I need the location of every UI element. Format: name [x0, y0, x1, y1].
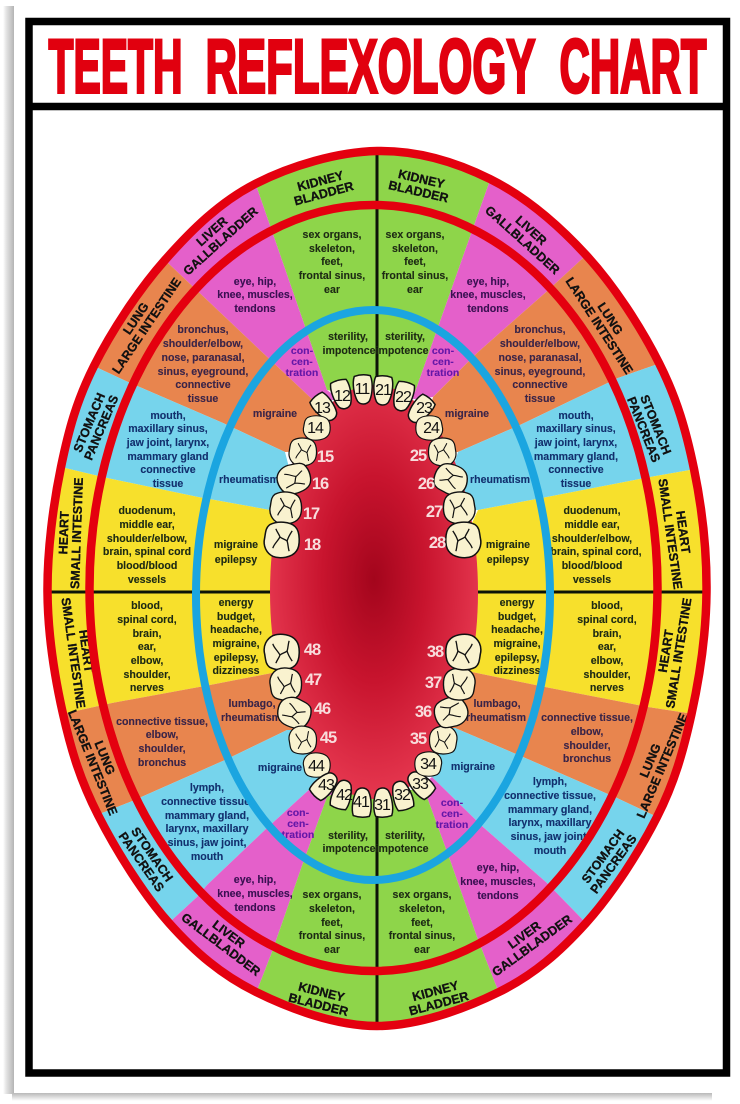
tooth numbers: 41	[353, 794, 370, 811]
tooth 35	[429, 726, 457, 754]
tooth 38	[446, 634, 481, 670]
zone text upper left	[103, 229, 376, 586]
text: blood: blood,	[591, 600, 623, 612]
text: rheumatism: rheumatism	[219, 474, 279, 486]
text: mouth: mammary gland,	[534, 451, 618, 463]
text: sex organs: ear	[414, 944, 430, 956]
label: heart small intestine lower left	[58, 595, 101, 709]
text: bronchus: nose, paranasal,	[161, 352, 245, 364]
text: eye hip: eye, hip,	[234, 276, 276, 288]
label: kidney bladder lower left	[287, 978, 353, 1019]
tooth numbers: 44	[308, 758, 325, 775]
label: kidney bladder upper left: KIDNEY	[296, 168, 346, 194]
text: sex organs: ear	[407, 284, 423, 296]
tooth 46	[274, 693, 315, 732]
text: duodenum: brain, spinal cord,	[550, 546, 642, 558]
tooth numbers: 28	[429, 534, 446, 552]
zone text upper right	[376, 229, 642, 586]
tooth numbers: 47	[305, 671, 322, 689]
text: sex organs: skeleton,	[399, 903, 445, 915]
label: liver gallbladder upper left: LIVER	[194, 214, 230, 249]
tooth numbers: 22	[395, 389, 412, 406]
tooth 37	[443, 668, 475, 700]
text: bronchus: sinus, eyeground,	[495, 366, 585, 378]
tooth 24	[416, 416, 443, 440]
tooth numbers: 15	[317, 448, 334, 466]
label: lung large intestine upper left: LUNG	[120, 300, 152, 337]
text: bronchus: connective	[175, 379, 231, 391]
tooth numbers: 24	[423, 420, 440, 437]
tooth numbers: 43	[318, 777, 335, 794]
label: lung large intestine lower left: LARGE INTESTINE	[65, 708, 120, 817]
text: blood: elbow,	[131, 655, 163, 667]
text: energy budget: epilepsy,	[214, 652, 258, 664]
text: bronchus: bronchus,	[177, 324, 229, 336]
label: stomach pancreas upper right: STOMACH	[637, 393, 674, 457]
text: duodenum: middle ear,	[564, 519, 620, 531]
text: blood: spinal cord,	[117, 614, 177, 626]
zone text lower left	[116, 597, 376, 956]
label: stomach pancreas lower right: PANCREAS	[588, 832, 640, 896]
label: stomach pancreas lower right: STOMACH	[579, 827, 627, 886]
text: duodenum: shoulder/elbow,	[107, 533, 187, 545]
tooth 45	[289, 726, 317, 754]
label: stomach pancreas upper left: STOMACH	[71, 391, 108, 454]
text: lymph: mouth	[534, 845, 566, 857]
tooth numbers: 46	[314, 700, 331, 718]
text: sterility: sterility,	[385, 830, 425, 842]
text: duodenum: brain, spinal cord	[103, 546, 191, 558]
text: eye hip: knee, muscles,	[450, 289, 526, 301]
label: liver gallbladder lower left: GALLBLADDER	[179, 910, 263, 979]
label: heart small intestine upper left	[55, 477, 86, 589]
text: duodenum: vessels	[573, 574, 611, 586]
text: sex organs: feet,	[411, 917, 433, 929]
text: connective tissue: connective tissue,	[541, 712, 633, 724]
text: connective tissue: shoulder,	[563, 740, 611, 752]
tooth numbers: 25	[410, 447, 427, 465]
tooth 32	[389, 779, 415, 812]
label: heart small intestine lower right: HEART	[656, 628, 676, 673]
text: lymph: sinus, jaw joint,	[511, 831, 589, 843]
text: lumbago rheumatism: rheumatism	[466, 712, 526, 724]
text: sex organs: ear	[324, 944, 340, 956]
text: blood: shoulder,	[583, 669, 631, 681]
tooth numbers: 31	[374, 797, 391, 814]
text: duodenum: duodenum,	[118, 505, 176, 517]
text: sterility: impotence	[376, 345, 429, 357]
tooth numbers: 13	[314, 400, 331, 417]
text: blood: elbow,	[591, 655, 623, 667]
text: lumbago rheumatism: rheumatism	[221, 712, 281, 724]
tooth 48	[264, 634, 299, 670]
text: eye hip: tendons	[477, 890, 519, 902]
tooth numbers: 45	[320, 729, 337, 747]
tooth 22	[390, 380, 416, 413]
text: energy budget: energy	[500, 597, 534, 609]
tooth 18	[264, 522, 299, 558]
label: kidney bladder lower left: BLADDER	[287, 991, 350, 1019]
text: blood: brain,	[593, 628, 621, 640]
outer red oval ring	[47, 151, 707, 1026]
text: sterility: impotence	[323, 843, 376, 855]
tooth 31	[373, 788, 393, 818]
text: blood: nerves	[590, 682, 624, 694]
text: blood: spinal cord,	[577, 614, 637, 626]
text: sex organs: skeleton,	[309, 903, 355, 915]
text: energy budget: headache,	[491, 624, 543, 636]
blue oval ring	[196, 310, 550, 880]
tooth 43	[308, 768, 342, 802]
label: liver gallbladder lower left: LIVER	[210, 918, 248, 951]
text: lymph: mouth	[191, 851, 223, 863]
colored sectors of the oval	[52, 155, 702, 1022]
text: sterility: sterility,	[328, 830, 368, 842]
tooth numbers: 18	[304, 536, 321, 554]
text: lymph: larynx, maxillary	[165, 823, 249, 835]
label: kidney bladder upper right	[387, 165, 453, 206]
tooth numbers: 32	[394, 787, 411, 804]
text: lymph: connective tissue,	[161, 796, 253, 808]
text: mouth: jaw joint, larynx,	[126, 437, 209, 449]
text: concentration: tration	[286, 367, 318, 379]
text: sex organs: skeleton,	[309, 243, 355, 255]
text: concentration: con-	[432, 345, 455, 357]
tooth numbers: 26	[418, 475, 435, 493]
text: mouth: connective	[140, 464, 196, 476]
text: sex organs: frontal sinus,	[382, 270, 448, 282]
tooth 41	[352, 788, 372, 818]
text: migraine: migraine	[445, 408, 489, 420]
tooth 47	[270, 668, 302, 700]
text: lumbago rheumatism: lumbago,	[473, 698, 521, 710]
text: energy budget: migraine,	[493, 638, 541, 650]
text: sex organs: frontal sinus,	[299, 270, 365, 282]
text: connective tissue: shoulder,	[138, 743, 186, 755]
tooth 42	[329, 778, 355, 811]
tooth numbers: 17	[303, 505, 320, 523]
text: lymph: lymph,	[190, 782, 224, 794]
text: mouth: tissue	[561, 478, 591, 490]
text: mouth: mouth,	[558, 410, 594, 422]
text: lymph: sinus, jaw joint,	[168, 837, 246, 849]
tooth 17	[270, 492, 302, 524]
text: bronchus: connective	[512, 379, 568, 391]
tooth 34	[415, 752, 442, 776]
tooth 16	[273, 459, 315, 498]
label: stomach pancreas lower left: STOMACH	[128, 825, 176, 884]
tooth numbers: 23	[416, 400, 433, 417]
text: duodenum: duodenum,	[563, 505, 621, 517]
label: heart small intestine lower right: SMALL INTESTINE	[663, 597, 695, 709]
text: migraine: migraine	[451, 761, 495, 773]
text: eye hip: knee, muscles,	[460, 876, 536, 888]
text: connective tissue: connective tissue,	[116, 716, 208, 728]
text: eye hip: tendons	[467, 303, 509, 315]
text: sex organs: feet,	[321, 917, 343, 929]
label: kidney bladder lower right: KIDNEY	[411, 978, 461, 1004]
tooth numbers: 38	[427, 643, 444, 661]
text: sterility: impotence	[323, 345, 376, 357]
text: concentration: con-	[291, 345, 314, 357]
label: kidney bladder lower right: BLADDER	[407, 989, 470, 1018]
label: kidney bladder upper right: BLADDER	[387, 178, 450, 206]
label: kidney bladder upper right: KIDNEY	[397, 167, 447, 191]
text: eye hip: knee, muscles,	[217, 888, 293, 900]
text: energy budget: epilepsy,	[495, 652, 539, 664]
text: lumbago rheumatism: lumbago,	[228, 698, 276, 710]
label: stomach pancreas upper right: PANCREAS	[624, 395, 663, 464]
label: liver gallbladder lower right: LIVER	[505, 919, 543, 952]
text: sterility: sterility,	[385, 331, 425, 343]
text: duodenum: middle ear,	[119, 519, 175, 531]
text: eye hip: tendons	[234, 303, 276, 315]
tooth 23	[404, 392, 437, 427]
text: blood: brain,	[133, 628, 161, 640]
tooth numbers: 42	[336, 787, 353, 804]
label: lung large intestine lower right: LARGE INTESTINE	[634, 711, 691, 820]
text: blood: ear,	[598, 641, 616, 653]
text: energy budget: energy	[219, 597, 253, 609]
tooth numbers: 12	[334, 388, 351, 405]
text: mouth: maxillary sinus,	[128, 423, 208, 435]
text: sex organs: frontal sinus,	[389, 930, 455, 942]
label: lung large intestine lower left: LUNG	[91, 739, 118, 777]
text: concentration: con-	[287, 807, 310, 819]
text: lymph: mammary gland,	[165, 810, 249, 822]
tooth 21	[373, 375, 393, 405]
label: kidney bladder upper left: BLADDER	[292, 179, 355, 208]
text: eye hip: eye, hip,	[234, 874, 276, 886]
zone text lower right	[376, 597, 637, 956]
text: concentration: con-	[441, 797, 464, 809]
tooth 44	[303, 753, 330, 777]
text: blood: ear,	[138, 641, 156, 653]
text: lymph: mammary gland,	[508, 804, 592, 816]
text: energy budget: dizziness	[212, 665, 260, 677]
tooth numbers: 37	[425, 674, 442, 692]
tooth numbers: 27	[426, 503, 443, 521]
tooth numbers: 36	[415, 703, 432, 721]
text: mouth: mouth,	[150, 410, 186, 422]
label: stomach pancreas lower left: PANCREAS	[116, 830, 167, 894]
text: bronchus: bronchus,	[514, 324, 566, 336]
label: lung large intestine lower right: LUNG	[637, 742, 664, 780]
text: duodenum: vessels	[128, 574, 166, 586]
title: TEETH	[48, 24, 182, 110]
text: eye hip: eye, hip,	[477, 862, 519, 874]
text: sex organs: feet,	[404, 256, 426, 268]
label: heart small intestine lower right	[650, 595, 695, 709]
text: blood: nerves	[130, 682, 164, 694]
text: energy budget: migraine,	[212, 638, 260, 650]
text: eye hip: knee, muscles,	[217, 289, 293, 301]
text: migraine epilepsy: migraine	[214, 539, 258, 551]
text: concentration: tration	[282, 829, 314, 841]
text: blood: shoulder,	[123, 669, 171, 681]
text: bronchus: sinus, eyeground,	[158, 366, 248, 378]
label: lung large intestine upper right: LUNG	[595, 300, 626, 337]
text: eye hip: tendons	[234, 902, 276, 914]
tooth 25	[428, 438, 456, 466]
label: lung large intestine upper left: LARGE INTESTINE	[110, 275, 184, 376]
text: eye hip: eye, hip,	[467, 276, 509, 288]
text: sex organs: sex organs,	[393, 889, 451, 901]
tooth 26	[430, 460, 471, 499]
label: liver gallbladder upper left: GALLBLADDER	[181, 204, 261, 278]
label: heart small intestine lower left: HEART	[76, 629, 96, 674]
text: connective tissue: bronchus	[138, 757, 186, 769]
text: bronchus: tissue	[188, 393, 218, 405]
tooth 12	[329, 378, 355, 411]
tooth 11	[353, 374, 373, 404]
text: sex organs: ear	[324, 284, 340, 296]
text: lymph: connective tissue,	[504, 790, 596, 802]
tooth numbers: 33	[412, 776, 429, 793]
tooth 28	[446, 522, 481, 558]
label: heart small intestine upper right: HEART	[673, 510, 693, 555]
label: lung large intestine upper right: LARGE INTESTINE	[563, 275, 636, 377]
text: concentration: cen-	[287, 818, 309, 830]
tooth numbers: 16	[312, 475, 329, 493]
text: bronchus: shoulder/elbow,	[500, 338, 580, 350]
text: migraine epilepsy: migraine	[486, 539, 530, 551]
text: mouth: jaw joint, larynx,	[534, 437, 617, 449]
text: sex organs: feet,	[321, 256, 343, 268]
tooth numbers: 48	[304, 641, 321, 659]
text: concentration: tration	[427, 367, 459, 379]
tooth numbers: 35	[410, 730, 427, 748]
text: lymph: lymph,	[533, 776, 567, 788]
label: heart small intestine upper right	[655, 476, 698, 590]
label: heart small intestine upper left: SMALL INTESTINE	[68, 477, 86, 589]
inner red oval ring	[90, 205, 658, 971]
tooth numbers	[303, 381, 446, 814]
label: kidney bladder lower left: KIDNEY	[297, 980, 347, 1005]
red mouth	[270, 385, 478, 799]
text: duodenum: blood/blood	[117, 560, 177, 572]
text: bronchus: tissue	[525, 393, 555, 405]
text: connective tissue: elbow,	[571, 726, 603, 738]
text: migraine: migraine	[258, 762, 302, 774]
label: kidney bladder upper left	[289, 167, 355, 208]
label: heart small intestine lower left: SMALL INTESTINE	[58, 597, 88, 709]
text: energy budget: budget,	[217, 611, 255, 623]
text: duodenum: shoulder/elbow,	[552, 533, 632, 545]
text: sterility: sterility,	[328, 331, 368, 343]
label: liver gallbladder lower right: GALLBLADDER	[490, 912, 575, 979]
tooth 33	[403, 767, 437, 801]
label: liver gallbladder upper right: GALLBLADDER	[482, 203, 562, 277]
text: blood: blood,	[131, 600, 163, 612]
text: energy budget: budget,	[498, 611, 536, 623]
text: sex organs: sex organs,	[303, 229, 361, 241]
label: heart small intestine upper right: SMALL INTESTINE	[655, 478, 685, 590]
label: kidney bladder lower right	[404, 977, 470, 1018]
text: sex organs: skeleton,	[392, 243, 438, 255]
text: mouth: connective	[548, 464, 604, 476]
organ band labels	[55, 165, 698, 1019]
text: concentration: cen-	[291, 356, 313, 368]
text: duodenum: blood/blood	[562, 560, 622, 572]
tooth 15	[289, 438, 317, 466]
text: migraine epilepsy: epilepsy	[215, 554, 257, 566]
text: bronchus: shoulder/elbow,	[163, 338, 243, 350]
text: energy budget: dizziness	[493, 665, 541, 677]
tooth numbers: 21	[375, 382, 392, 399]
text: sex organs: frontal sinus,	[299, 930, 365, 942]
text: energy budget: headache,	[210, 624, 262, 636]
text: connective tissue: bronchus	[563, 753, 611, 765]
label: heart small intestine upper left: HEART	[56, 511, 72, 555]
text: sex organs: sex organs,	[303, 889, 361, 901]
text: concentration: tration	[436, 819, 468, 831]
tooth 36	[430, 693, 472, 732]
tooth 14	[303, 416, 330, 440]
center dividing lines	[48, 152, 706, 1026]
text: migraine: migraine	[253, 408, 297, 420]
text: rheumatism: rheumatism	[470, 474, 530, 486]
text: sex organs: sex organs,	[386, 229, 444, 241]
tooth 27	[443, 492, 475, 524]
text: connective tissue: elbow,	[146, 729, 178, 741]
tooth numbers: 14	[307, 420, 324, 437]
text: lymph: larynx, maxillary	[508, 817, 592, 829]
label: liver gallbladder upper right: LIVER	[513, 213, 549, 248]
teeth	[264, 374, 481, 818]
text: mouth: mammary gland	[127, 451, 209, 463]
text: sterility: impotence	[376, 843, 429, 855]
text: bronchus: nose, paranasal,	[498, 352, 582, 364]
text: mouth: tissue	[153, 478, 183, 490]
text: concentration: cen-	[441, 808, 463, 820]
text: concentration: cen-	[432, 356, 454, 368]
text: migraine epilepsy: epilepsy	[487, 554, 529, 566]
text: mouth: maxillary sinus,	[536, 423, 616, 435]
label: stomach pancreas upper left: PANCREAS	[81, 393, 121, 462]
tooth numbers: 11	[355, 381, 370, 398]
tooth 13	[308, 390, 341, 425]
tooth numbers: 34	[420, 756, 437, 773]
